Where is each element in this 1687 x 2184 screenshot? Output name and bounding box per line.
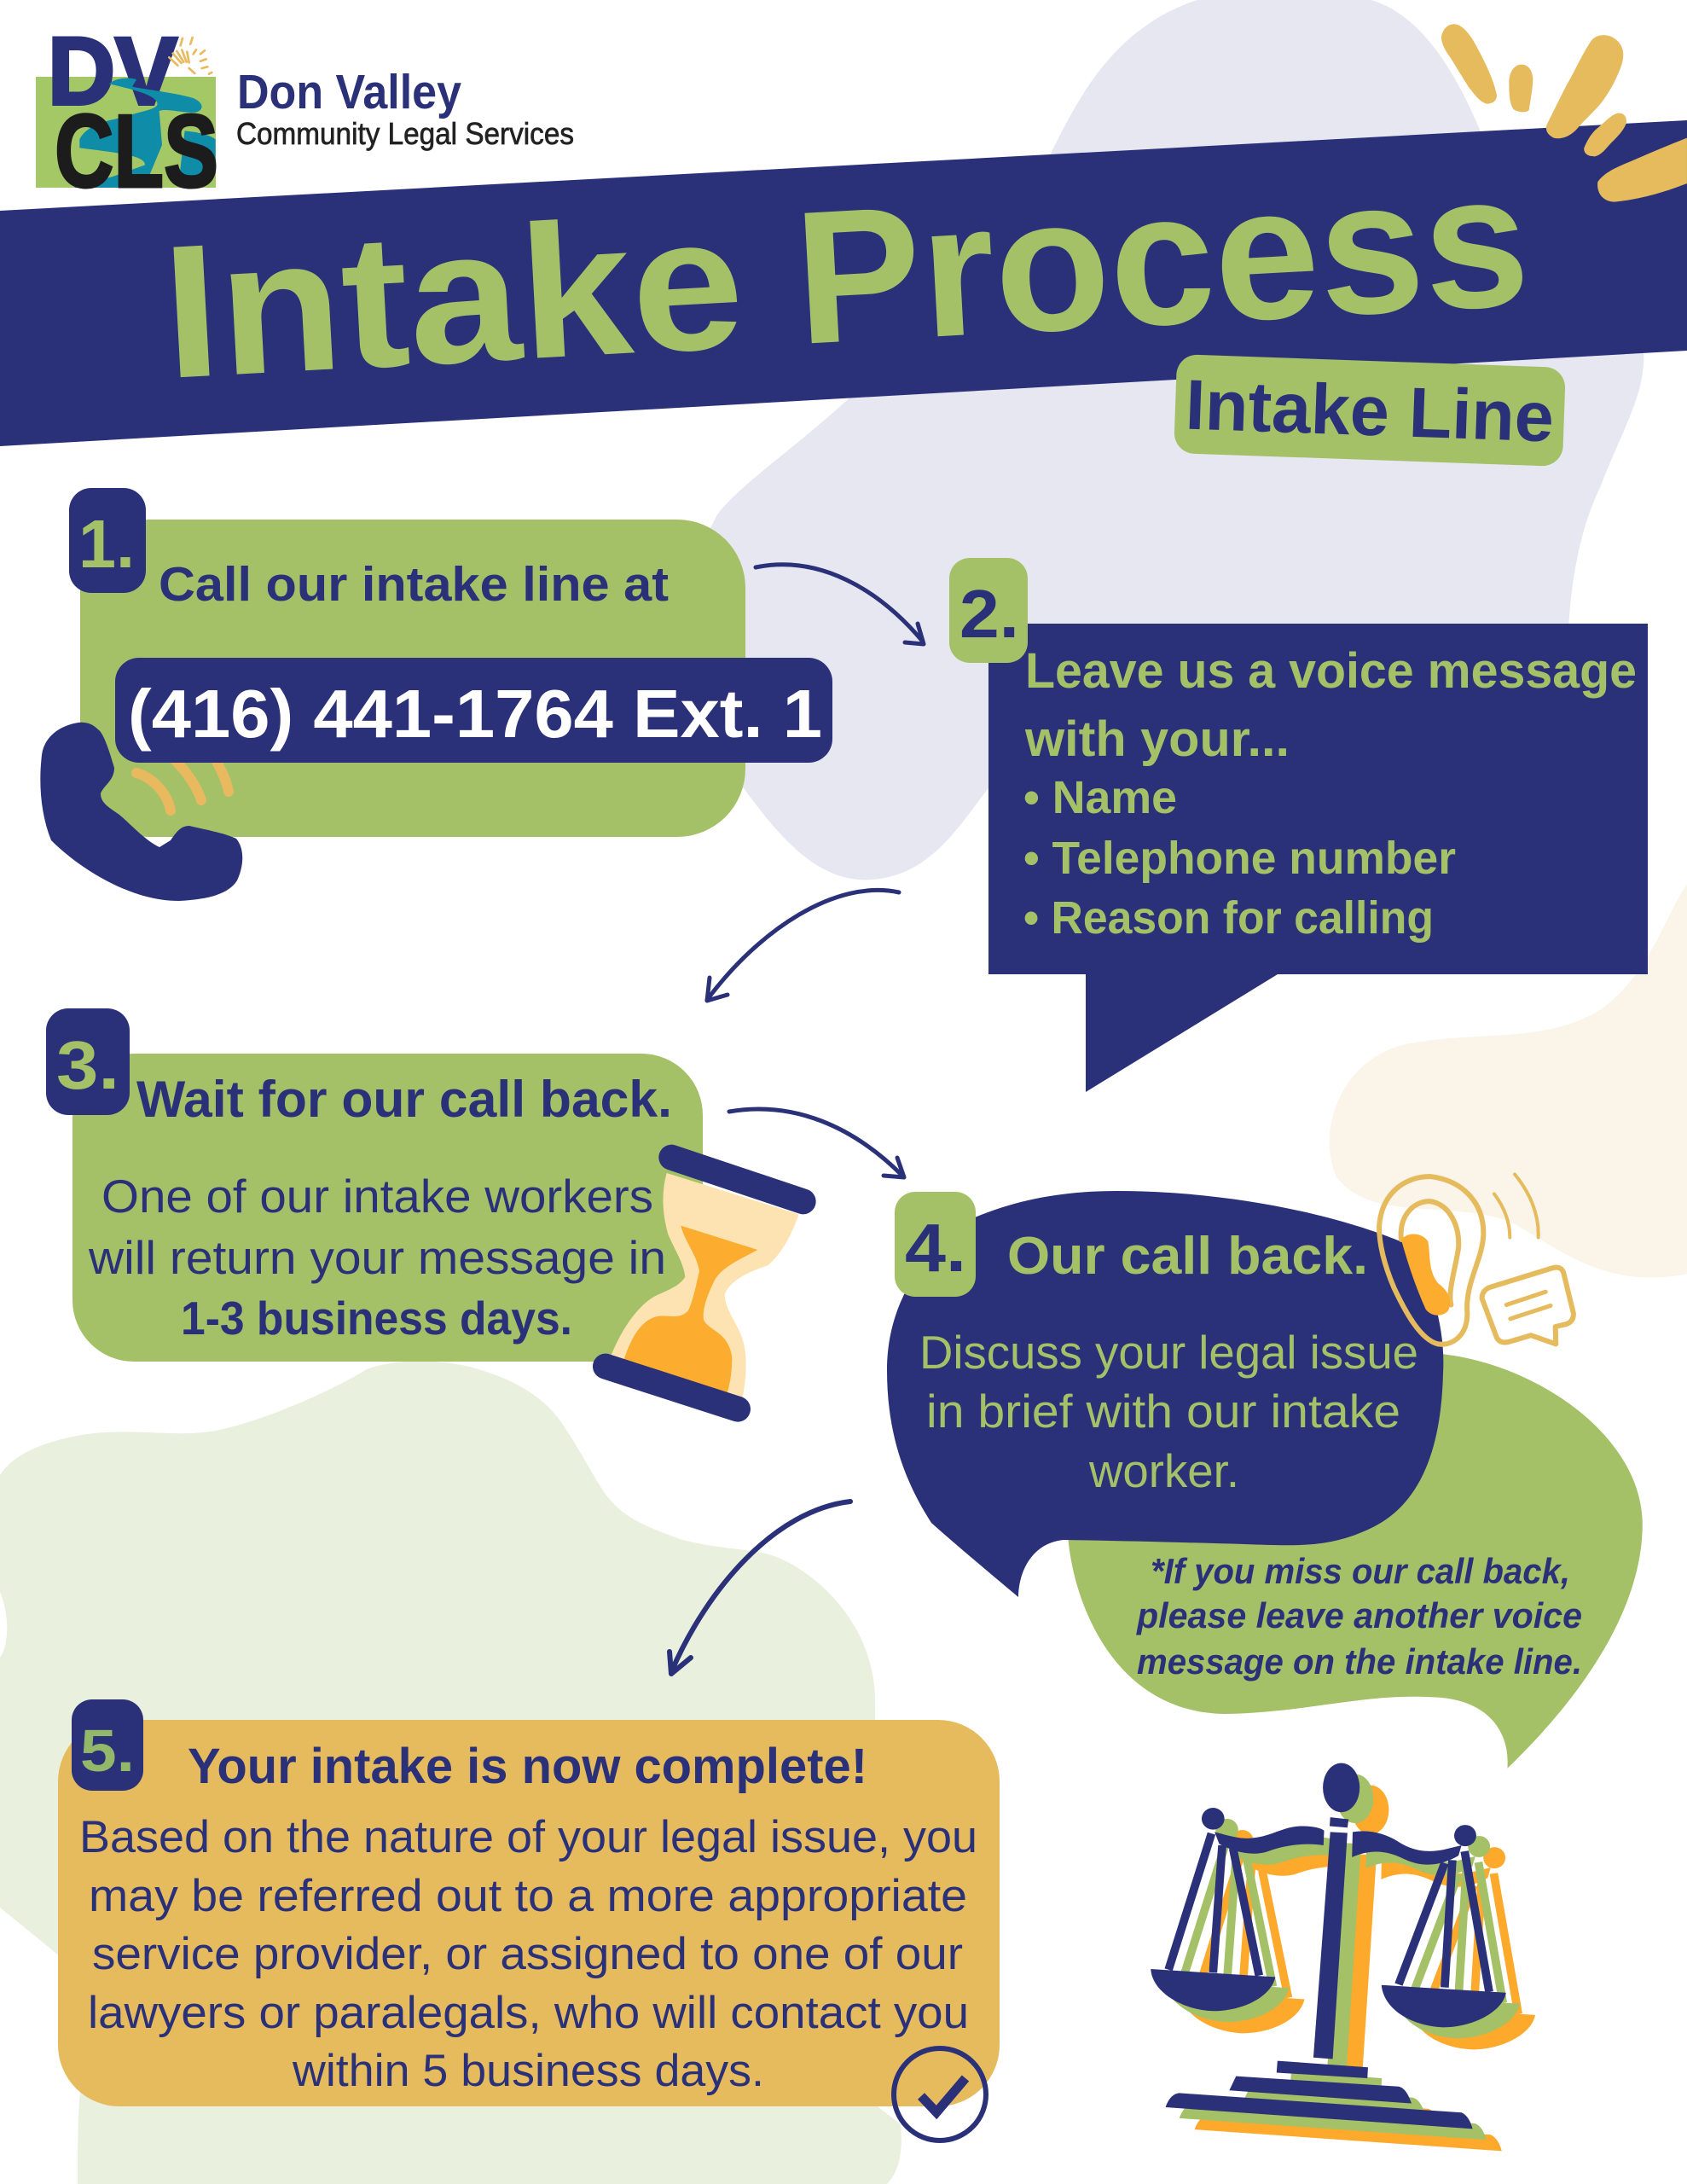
icon: sound arcs	[136, 755, 229, 810]
background blob: cream	[1330, 884, 1687, 1278]
step 4 text: worker.	[1088, 1444, 1239, 1497]
arrow: step 1 to step 2	[756, 565, 924, 644]
step 5 text: within 5 business days.	[292, 2046, 764, 2096]
step 5 text: service provider, or assigned to one of our	[92, 1929, 963, 1979]
title: Intake	[158, 177, 749, 419]
icon: ear and chat bubble	[1379, 1174, 1574, 1345]
step 4 badge	[895, 1192, 976, 1297]
note text	[1136, 1551, 1582, 1682]
step 2 badge	[949, 558, 1028, 663]
icon: check mark in circle	[894, 2048, 986, 2140]
step 3 text: One of our intake workers	[101, 1170, 653, 1223]
panel: step 5	[58, 1699, 1000, 2106]
step 5 badge: 5.	[80, 1717, 135, 1784]
step 3 text: 1-3 business days.	[181, 1292, 572, 1345]
step 5 text: Based on the nature of your legal issue, you	[79, 1812, 977, 1862]
note text: *If you miss our call back,	[1151, 1551, 1570, 1591]
step 1 badge: 1.	[78, 506, 135, 582]
title: Process	[790, 134, 1533, 385]
step 1 heading: Call our intake line at	[159, 557, 669, 612]
note text: please leave another voice	[1136, 1595, 1582, 1635]
step 4 text: in brief with our intake	[926, 1385, 1400, 1438]
title banner	[0, 120, 1687, 446]
step 2 text: Leave us a voice message	[1025, 643, 1637, 699]
step 3 text: will return your message in	[88, 1231, 666, 1284]
logo: organisation name: Don Valley	[237, 65, 461, 119]
step 4 badge: 4.	[905, 1210, 966, 1286]
subtitle pill: Intake Line: Intake Line	[1184, 364, 1555, 457]
step 2 text	[1023, 643, 1637, 944]
step 5 heading: Your intake is now complete!	[188, 1739, 867, 1794]
note text: message on the intake line.	[1137, 1641, 1582, 1682]
step 2 text: • Telephone number	[1023, 833, 1456, 884]
step 5 text	[79, 1812, 977, 2096]
step 4 text	[919, 1326, 1418, 1497]
panel: step 3	[46, 1008, 703, 1362]
step 2 text: • Reason for calling	[1023, 892, 1434, 944]
phone number	[115, 658, 832, 763]
arrow: step 4 to step 5	[670, 1502, 850, 1674]
step 2 text: with your...	[1024, 712, 1290, 767]
scales layer: navy front	[1151, 1763, 1506, 2129]
step 2 badge: 2.	[959, 576, 1019, 652]
icon: telephone handset	[40, 723, 242, 901]
step 2 text: • Name	[1023, 772, 1177, 823]
logo: DVCLS mark: DV	[48, 18, 177, 125]
step 3 badge: 3.	[56, 1027, 119, 1103]
arrow: step 2 to step 3	[707, 890, 899, 1001]
decorative sun rays	[1441, 24, 1687, 202]
step 3 badge	[46, 1008, 130, 1115]
scales layer: green shadow	[1164, 1774, 1520, 2140]
panel: step 4 speech bubble	[887, 1191, 1443, 1597]
step 4 heading: Our call back.	[1007, 1227, 1368, 1286]
panel: step 1	[40, 488, 832, 901]
step 3 text	[88, 1170, 666, 1345]
step 5 text: may be referred out to a more appropriate	[89, 1871, 967, 1921]
step 4 text: Discuss your legal issue	[919, 1326, 1418, 1379]
note bubble: missed call	[1068, 1353, 1643, 1769]
title	[158, 134, 1533, 419]
icon: scales of justice	[1151, 1763, 1535, 2151]
step 5 badge	[72, 1699, 143, 1791]
logo: organisation name: Community Legal Services	[236, 116, 574, 151]
icon: hourglass	[606, 1158, 803, 1409]
panel: step 2 speech box	[949, 558, 1648, 1092]
step 5 text: lawyers or paralegals, who will contact you	[88, 1988, 969, 2038]
logo: DVCLS mark: CLS	[55, 93, 218, 209]
background blob: light green	[0, 1362, 901, 2184]
logo: DVCLS mark	[36, 18, 218, 209]
logo: organisation name	[236, 65, 574, 151]
arrow: step 3 to step 4	[729, 1109, 904, 1177]
background blob: lavender	[696, 0, 1644, 880]
step 3 heading: Wait for our call back.	[136, 1071, 672, 1128]
phone number: (416) 441-1764 Ext. 1	[128, 676, 822, 752]
step 1 badge	[69, 488, 146, 593]
scales layer: orange shadow	[1180, 1786, 1535, 2151]
